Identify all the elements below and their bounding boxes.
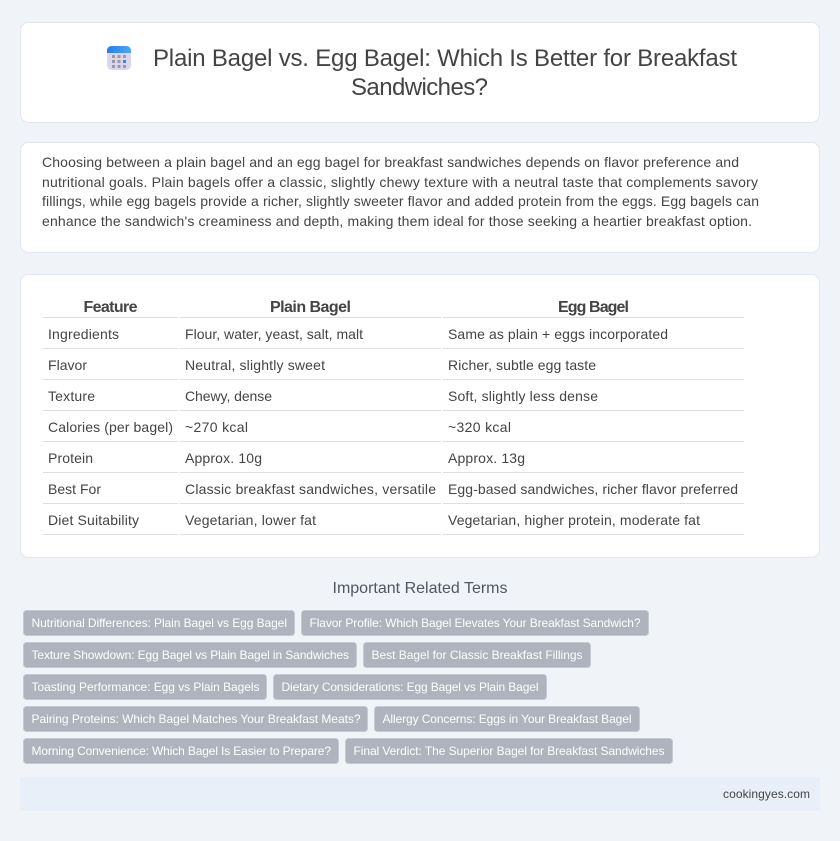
row: ingredients: Flour, water, yeast, salt, malt — [185, 326, 363, 342]
row: ingredients: Same as plain + eggs incorporated — [448, 326, 668, 342]
tag: allergy concerns — [374, 706, 640, 732]
panel: comparison table card — [20, 274, 820, 558]
footer source: cookingyes.com — [723, 787, 810, 801]
row: diet suitability: Vegetarian, lower fat — [185, 512, 316, 528]
row: best for: Classic breakfast sandwiches, versatile — [185, 481, 436, 497]
text block: introduction: fillings, while egg bagels provide a richer, slightly sweeter flavor and added protein from the eggs. Egg bagels can — [42, 193, 759, 209]
tag: best bagel — [364, 642, 590, 668]
table header: feature: Feature — [84, 299, 138, 316]
row: best for — [48, 481, 738, 497]
row: texture: Texture — [48, 388, 95, 404]
row: protein: Approx. 13g — [448, 450, 525, 466]
tag: dietary considerations — [274, 674, 546, 700]
row: texture: Chewy, dense — [185, 388, 272, 404]
row: flavor: Neutral, slightly sweet — [185, 357, 325, 373]
icon: calendar — [107, 46, 131, 70]
row: calories: ~320 kcal — [448, 419, 511, 435]
tag: pairing proteins — [24, 706, 368, 732]
row: ingredients — [48, 326, 668, 342]
row: calories — [48, 419, 511, 435]
row: best for: Egg-based sandwiches, richer flavor preferred — [448, 481, 738, 497]
panel: introduction card — [20, 142, 820, 252]
tag: morning convenience: Morning Convenience: Which Bagel Is Easier to Prepare? — [32, 744, 331, 758]
text block: introduction: nutritional goals. Plain bagels offer a classic, slightly chewy texture with a neutral taste that complements savory — [42, 174, 758, 190]
tag group: related terms — [24, 610, 672, 764]
panel: title card — [20, 22, 820, 122]
row: texture: Soft, slightly less dense — [448, 388, 598, 404]
row: protein — [48, 450, 525, 466]
row: diet suitability — [48, 512, 700, 528]
row: protein: Approx. 10g — [185, 450, 262, 466]
tag: flavor profile: Flavor Profile: Which Bagel Elevates Your Breakfast Sandwich? — [310, 616, 641, 630]
row: texture — [48, 388, 598, 404]
tag: pairing proteins: Pairing Proteins: Which Bagel Matches Your Breakfast Meats? — [32, 712, 361, 726]
tag: morning convenience — [24, 738, 338, 764]
tag: best bagel: Best Bagel for Classic Breakfast Fillings — [372, 648, 582, 662]
row: protein: Protein — [48, 450, 93, 466]
row: calories: Calories (per bagel) — [48, 419, 173, 435]
tag: texture showdown: Texture Showdown: Egg Bagel vs Plain Bagel in Sandwiches — [32, 648, 349, 662]
row: diet suitability: Diet Suitability — [48, 512, 139, 528]
tag: allergy concerns: Allergy Concerns: Eggs in Your Breakfast Bagel — [382, 712, 632, 726]
row: ingredients: Ingredients — [48, 326, 119, 342]
tag: toasting performance — [24, 674, 266, 700]
tag: texture showdown — [24, 642, 356, 668]
tag: flavor profile — [302, 610, 648, 636]
tag: final verdict — [346, 738, 672, 764]
row: flavor — [48, 357, 596, 373]
text block: introduction: enhance the sandwich's creaminess and depth, making them ideal for those seeking a heartier breakfast option. — [42, 213, 752, 229]
row: flavor: Richer, subtle egg taste — [448, 357, 596, 373]
tag: nutritional differences: Nutritional Differences: Plain Bagel vs Egg Bagel — [32, 616, 287, 630]
table rules — [43, 317, 744, 535]
heading: related terms: Important Related Terms — [332, 580, 508, 597]
row: best for: Best For — [48, 481, 101, 497]
tag: toasting performance: Toasting Performance: Egg vs Plain Bagels — [32, 680, 260, 694]
row: diet suitability: Vegetarian, higher protein, moderate fat — [448, 512, 700, 528]
title: Sandwiches? — [351, 74, 488, 101]
text block: introduction — [42, 154, 759, 229]
tag: nutritional differences — [24, 610, 294, 636]
row: calories: ~270 kcal — [185, 419, 248, 435]
tag: final verdict: Final Verdict: The Superior Bagel for Breakfast Sandwiches — [354, 744, 664, 758]
footer bar — [20, 777, 820, 811]
row: flavor: Flavor — [48, 357, 87, 373]
title: Plain Bagel vs. Egg Bagel: Which Is Better for Breakfast — [153, 45, 737, 72]
table header: plain bagel: Plain Bagel — [270, 299, 351, 316]
text block: introduction: Choosing between a plain bagel and an egg bagel for breakfast sandwiches depends on flavor preference and — [42, 154, 739, 170]
table header: egg bagel: Egg Bagel — [558, 299, 629, 316]
title — [153, 45, 737, 101]
tag: dietary considerations: Dietary Considerations: Egg Bagel vs Plain Bagel — [282, 680, 538, 694]
